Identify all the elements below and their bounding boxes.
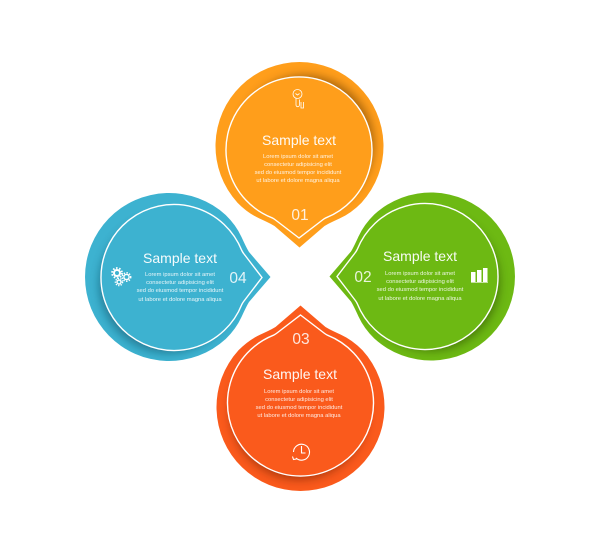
text block: 01: ut labore et dolore magna aliqua xyxy=(256,178,340,184)
text block: 02: sed do eiusmod tempor incididunt xyxy=(377,287,464,293)
text block: 02: Lorem ipsum dolor sit amet xyxy=(385,271,455,277)
text block: 01: Lorem ipsum dolor sit amet xyxy=(263,154,333,160)
number: 03: 03 xyxy=(292,331,310,348)
text block: 04: ut labore et dolore magna aliqua xyxy=(138,297,222,303)
heading: 02: Sample text xyxy=(383,248,457,264)
text block: 02 xyxy=(377,271,464,302)
panel: 03 red drop xyxy=(216,306,384,491)
text block: 04: Lorem ipsum dolor sit amet xyxy=(145,272,215,278)
number: 01: 01 xyxy=(291,207,309,224)
icon: bar chart xyxy=(471,268,488,283)
heading: 04: Sample text xyxy=(143,250,217,266)
heading: 01: Sample text xyxy=(262,132,336,148)
text block: 04: sed do eiusmod tempor incididunt xyxy=(137,288,224,294)
text block: 02: ut labore et dolore magna aliqua xyxy=(378,296,462,302)
text block: 01: consectetur adipisicing elit xyxy=(264,162,332,168)
text block: 03: sed do eiusmod tempor incididunt xyxy=(256,405,343,411)
icon: clock xyxy=(292,444,309,460)
number: 04: 04 xyxy=(229,270,247,287)
text block: 04 xyxy=(137,272,224,303)
text block: 04: consectetur adipisicing elit xyxy=(146,280,214,286)
text block: 01: sed do eiusmod tempor incididunt xyxy=(255,170,342,176)
number: 02: 02 xyxy=(354,269,372,286)
text block: 03 xyxy=(256,389,343,419)
panel: 02 green drop xyxy=(330,192,515,360)
panel: 04 blue drop xyxy=(85,193,270,361)
text block: 03: ut labore et dolore magna aliqua xyxy=(257,413,341,419)
text block: 02: consectetur adipisicing elit xyxy=(386,279,454,285)
text block: 03: consectetur adipisicing elit xyxy=(265,397,333,403)
icon: gears xyxy=(112,268,131,286)
text block: 01 xyxy=(255,154,342,184)
text block: 03: Lorem ipsum dolor sit amet xyxy=(264,389,334,395)
panel: 01 orange drop xyxy=(216,62,384,248)
icon: light bulb xyxy=(293,90,304,108)
heading: 03: Sample text xyxy=(263,366,337,382)
